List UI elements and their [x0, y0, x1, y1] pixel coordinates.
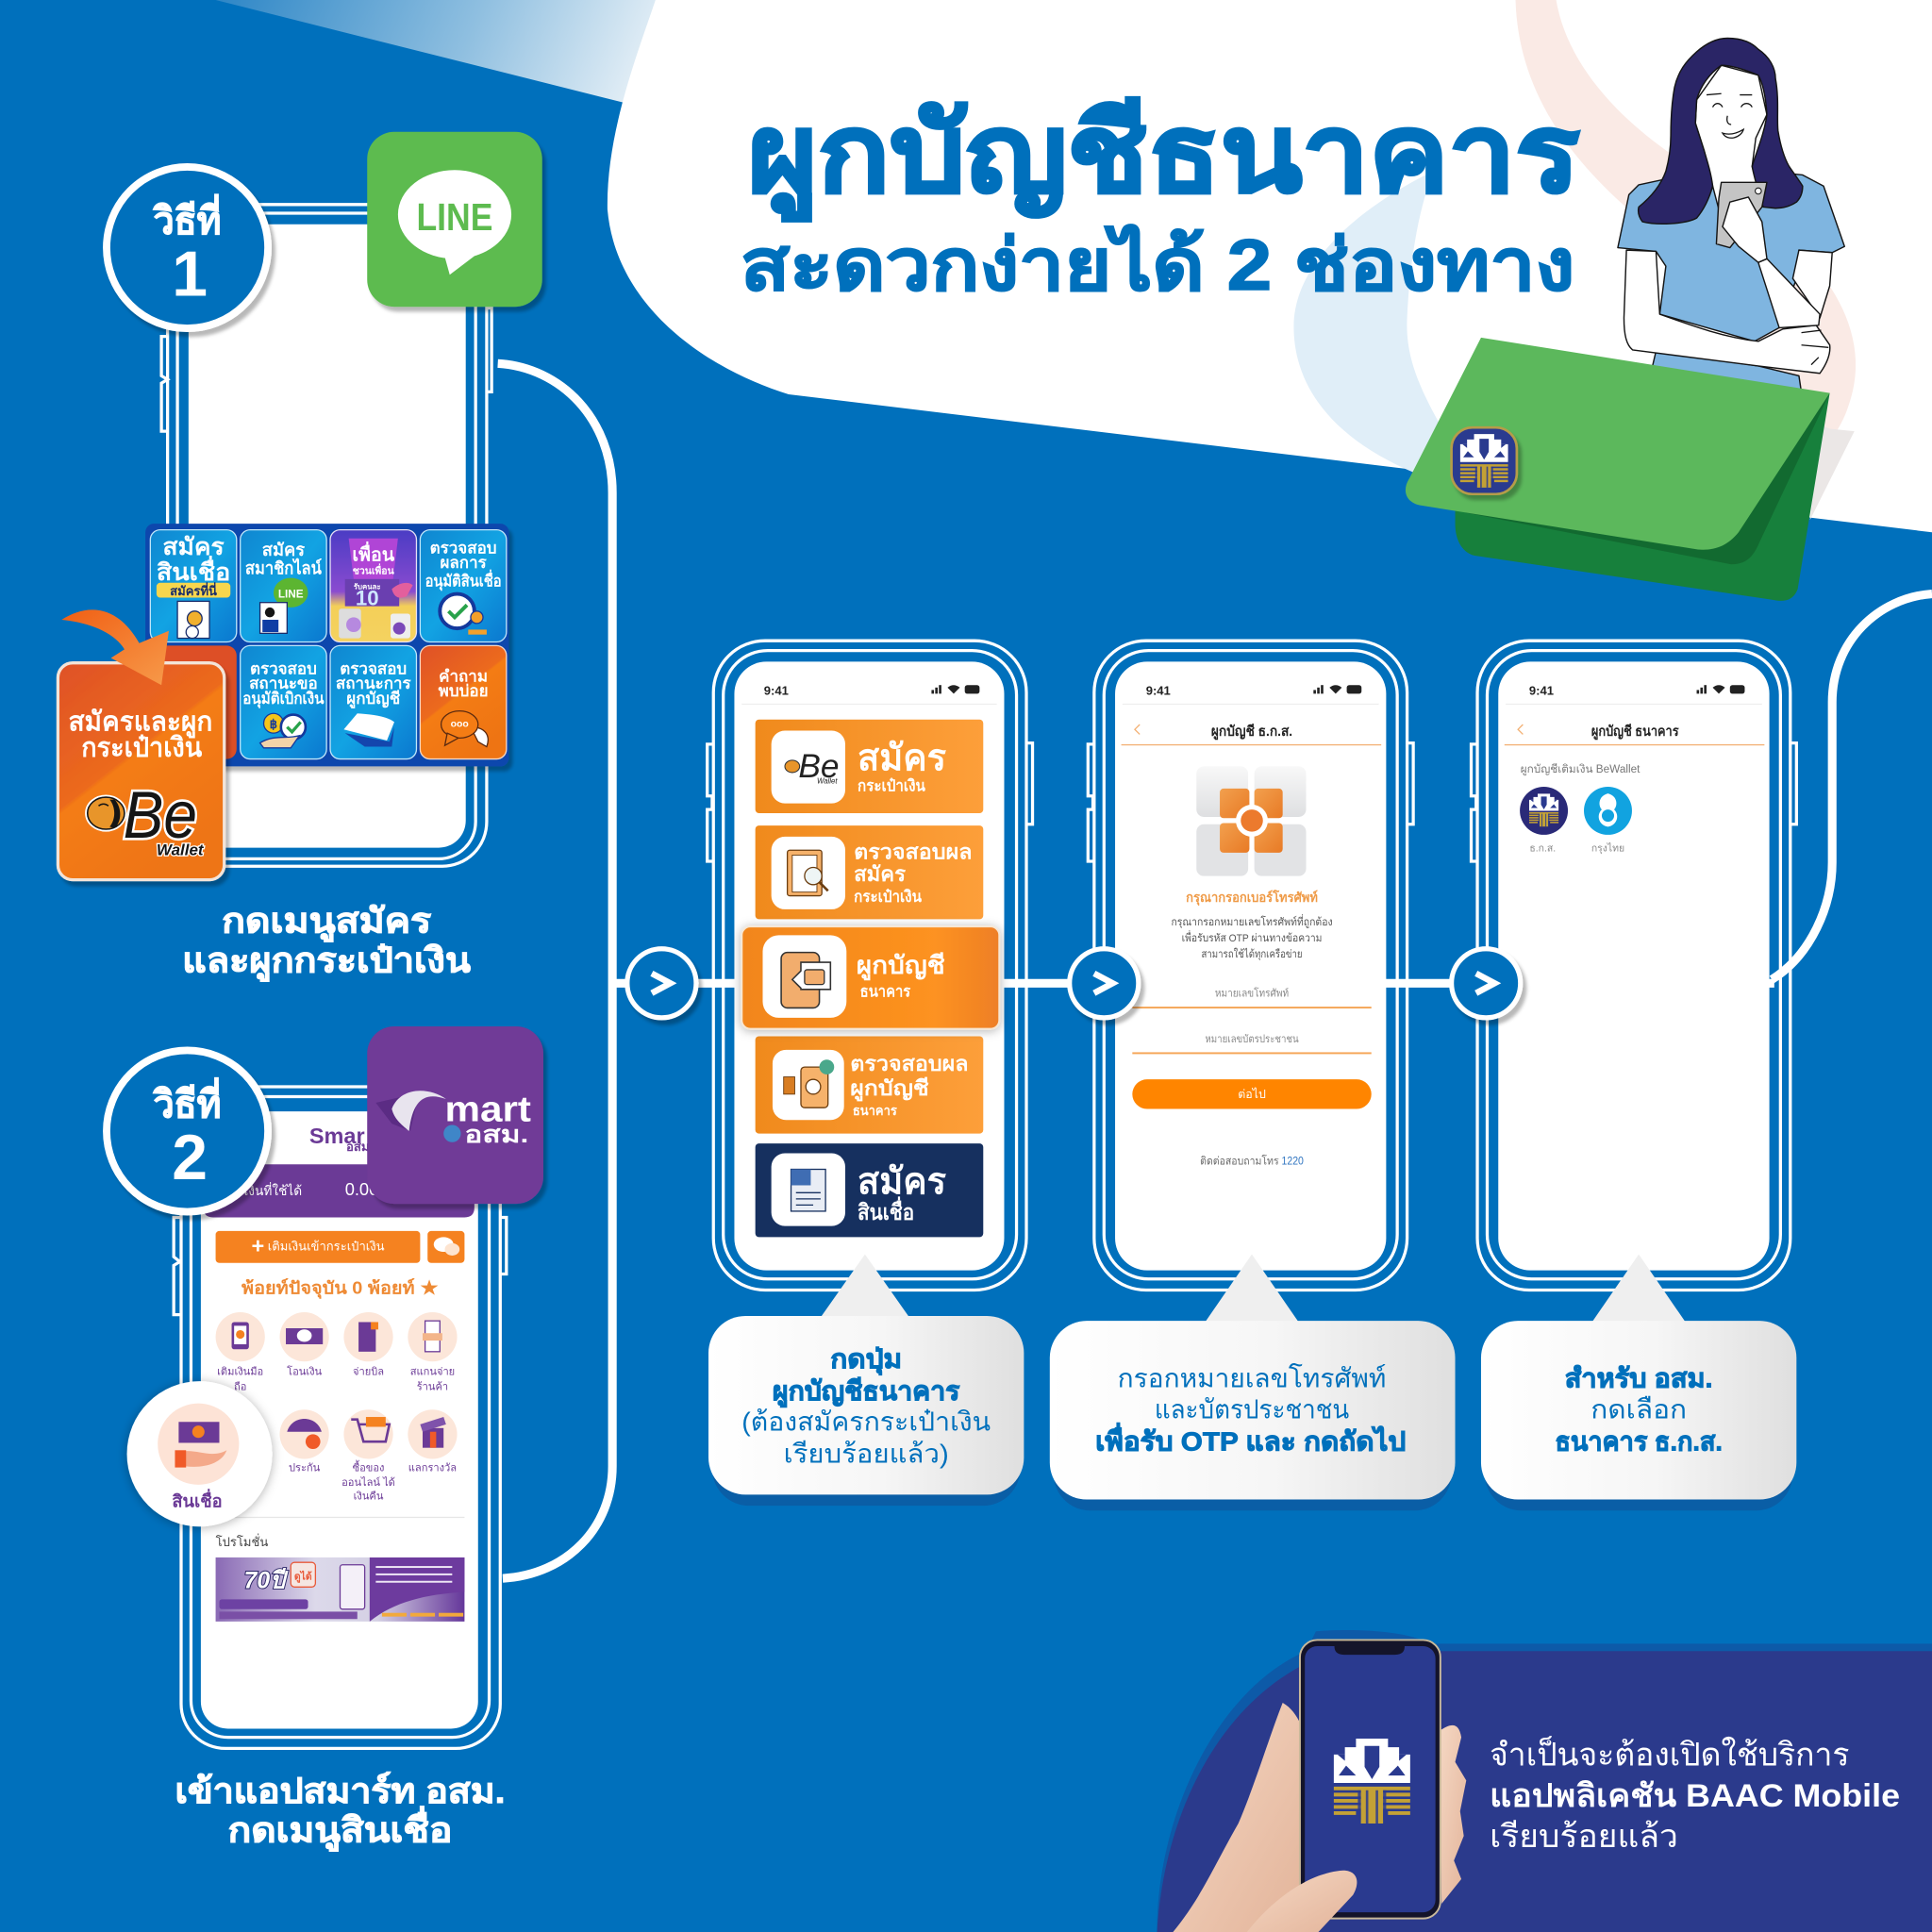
callout: press button: [708, 1255, 1024, 1506]
menu card: check binding: ธนาคาร: [853, 1104, 897, 1119]
icon: Krungthai bank: กรุงไทย: [1591, 842, 1624, 855]
top-left light wedge: [216, 0, 659, 105]
tile: binding status: [330, 645, 416, 759]
OTP prompt text: กรุณากรอกหมายเลขโทรศัพท์ที่ถูกต้อง: [1171, 914, 1333, 928]
tile: friend promo: 10: [356, 586, 379, 609]
hand holding phone: [1173, 1640, 1466, 1932]
pale pink swoosh: [1516, 0, 1856, 468]
method 2 badge: วิธีที่: [152, 1077, 221, 1126]
tile: disbursement status: อนุมัติเบิกเงิน: [242, 690, 325, 708]
tile: loan: สมัครที่นี่: [170, 581, 217, 598]
tile: LINE member: LINE: [278, 588, 304, 600]
panel: BAAC Mobile note: [1157, 1630, 1932, 1932]
service icons: [216, 1312, 458, 1458]
icon: LINE app: LINE: [416, 195, 492, 239]
arrow 1: [627, 949, 696, 1018]
note text: แอปพลิเคชัน BAAC Mobile: [1490, 1778, 1900, 1814]
service labels: ประกัน: [289, 1463, 321, 1474]
caption: method 1: [182, 902, 471, 983]
section label: ผูกบัญชีเติมเงิน BeWallet: [1521, 762, 1641, 776]
right upper arm: [1792, 250, 1832, 318]
callout: press button: (ต้องสมัครกระเป๋าเงิน: [741, 1407, 991, 1436]
panel: phone 1 LINE: [161, 205, 491, 866]
tile: disbursement status: สถานะขอ: [249, 675, 318, 692]
contact line: ติดต่อสอบถามโทร 1220: [1200, 1154, 1304, 1167]
next button: [1132, 1079, 1372, 1109]
screen header: ผูกบัญชี ธนาคาร: [1591, 724, 1679, 741]
highlighted card: BeWallet signup: กระเป๋าเงิน: [81, 733, 203, 763]
balance bar: 0.00: [345, 1179, 378, 1199]
method 1 badge: วิธีที่: [152, 193, 221, 242]
connector lines: [498, 363, 1932, 1578]
BeWallet logo: [88, 777, 205, 858]
tile: check approval: [420, 530, 507, 641]
envelope shadow: [1810, 425, 1855, 520]
icon: BAAC bank: [1520, 787, 1568, 855]
service labels: [217, 1365, 457, 1503]
app logo: อสม.: [346, 1140, 373, 1154]
caption: method 1: และผูกกระเป๋าเงิน: [182, 941, 471, 983]
promotion banner: [216, 1557, 464, 1622]
illustration: woman with phone: [1618, 38, 1844, 400]
menu card: wallet signup: Be: [798, 748, 839, 785]
points: พ้อยท์ปัจจุบัน 0 พ้อยท์ ★: [242, 1277, 439, 1299]
note text: เรียบร้อยแล้ว: [1490, 1819, 1678, 1855]
service labels: เติมเงินมือ: [217, 1366, 263, 1378]
method 2 badge: 2: [172, 1123, 208, 1193]
callout: choose bank: สำหรับ อสม.: [1565, 1364, 1713, 1393]
caption: method 2: กดเมนูสินเชื่อ: [228, 1806, 452, 1853]
hand on phone: [1723, 197, 1767, 262]
neck and face: [1695, 65, 1767, 209]
left arm: [1624, 250, 1830, 374]
menu card: loan signup: สินเชื่อ: [858, 1196, 914, 1224]
service labels: ถือ: [234, 1380, 246, 1392]
balance bar: [204, 1164, 475, 1217]
callout: choose bank: ธนาคาร ธ.ก.ส.: [1555, 1426, 1723, 1456]
callout: fill phone number: [1050, 1255, 1456, 1510]
facial features: [1707, 93, 1752, 138]
envelope back: [1456, 393, 1830, 601]
tile: loan: สมัคร: [162, 535, 225, 560]
hand on arm: [1802, 330, 1828, 365]
note text: [1490, 1736, 1900, 1855]
menu card highlighted: bind account: ธนาคาร: [860, 983, 911, 1001]
service labels: โอนเงิน: [287, 1365, 323, 1378]
status bar: [1123, 684, 1379, 705]
icon: Krungthai bank: [1584, 787, 1632, 855]
tile: LINE member: [241, 530, 326, 641]
menu card: check signup: ตรวจสอบผล: [854, 840, 973, 863]
loan highlight circle: [127, 1381, 273, 1526]
menu card: check binding: ตรวจสอบผล: [850, 1052, 969, 1075]
tile: disbursement status: ตรวจสอบ: [250, 659, 317, 677]
callout: fill phone number: เพื่อรับ OTP และ กดถัดไป: [1095, 1422, 1406, 1456]
OTP prompt text: [1171, 889, 1333, 960]
tile: loan: [150, 530, 237, 641]
menu card: wallet signup: กระเป๋าเงิน: [858, 777, 925, 795]
arrow 2: [1070, 949, 1139, 1018]
panel: phone OTP form: [1088, 641, 1413, 1291]
icon: security key: [1196, 766, 1306, 876]
tile: loan: สินเชื่อ: [157, 556, 230, 586]
tile: friend promo: รับคนละ: [354, 582, 381, 591]
tile: LINE member: สมาชิกไลน์: [245, 558, 322, 578]
panel: app phone menu: [708, 641, 1033, 1291]
service labels: เงินคืน: [354, 1491, 384, 1503]
loan highlight circle: สินเชื่อ: [172, 1488, 223, 1510]
tile: check approval: อนุมัติสินเชื่อ: [425, 570, 502, 591]
menu card highlighted: bind account: [741, 926, 999, 1029]
tile: disbursement status: ฿: [270, 717, 277, 731]
callout: press button: กดปุ่ม: [830, 1344, 902, 1375]
highlighted card: BeWallet signup: [58, 663, 225, 880]
OTP prompt text: เพื่อรับรหัส OTP ผ่านทางข้อความ: [1182, 930, 1322, 944]
forearm: [1758, 258, 1820, 327]
OTP prompt text: สามารถใช้ได้ทุกเครือข่าย: [1201, 948, 1303, 960]
menu card: check binding: ผูกบัญชี: [850, 1076, 929, 1102]
title: ผูกบัญชีธนาคาร: [748, 93, 1579, 221]
panel shadow band: [1157, 1630, 1932, 1932]
tile: orange hidden: [150, 645, 237, 759]
input fields: หมายเลขบัตรประชาชน: [1205, 1034, 1299, 1045]
tile: disbursement status: [241, 645, 326, 759]
title: [741, 93, 1579, 306]
tile: LINE member: สมัคร: [262, 540, 305, 559]
callout: press button: เรียบร้อยแล้ว): [784, 1439, 949, 1468]
arrow nodes: [627, 949, 1521, 1018]
screen header: [1122, 724, 1381, 745]
note text: จำเป็นจะต้องเปิดใช้บริการ: [1490, 1736, 1849, 1774]
LINE menu grid: [145, 524, 508, 766]
caption: method 2: เข้าแอปสมาร์ท อสม.: [175, 1772, 506, 1810]
status bar: [1506, 684, 1762, 705]
panel: phone bank select: [1472, 641, 1796, 1291]
promotion banner: 70ปี: [244, 1568, 289, 1594]
screen header: [1505, 724, 1764, 745]
tile: FAQ: พบบ่อย: [439, 682, 489, 700]
icon: LINE app: [367, 132, 542, 307]
top-up button: +: [251, 1233, 264, 1257]
screen header: ผูกบัญชี ธ.ก.ส.: [1211, 724, 1292, 741]
illustration: green envelope: [1406, 338, 1855, 601]
service labels: ซื้อของ: [353, 1460, 384, 1474]
callout: choose bank: กดเลือก: [1591, 1394, 1687, 1424]
phone in hand: [1716, 182, 1767, 248]
envelope fold: [1465, 393, 1830, 564]
tile: friend promo: ชวนเพื่อน: [353, 563, 395, 577]
method 1 badge: [107, 167, 268, 328]
balance bar: เงินที่ใช้ได้: [244, 1182, 302, 1198]
BeWallet logo: Be: [124, 777, 197, 852]
service labels: ออนไลน์ ได้: [341, 1476, 395, 1489]
caption: method 2: [175, 1772, 506, 1853]
service labels: สแกนจ่าย: [410, 1367, 455, 1378]
promotion heading: โปรโมชั่น: [216, 1533, 268, 1549]
tile: binding status: ผูกบัญชี: [346, 689, 401, 709]
next button: ต่อไป: [1238, 1088, 1266, 1101]
BAAC badge: [1452, 427, 1517, 494]
envelope flap: [1406, 338, 1830, 550]
menu card: check binding: [756, 1036, 983, 1134]
shirt: [1618, 166, 1844, 341]
highlighted card: BeWallet signup: สมัครและผูก: [68, 708, 212, 739]
service labels: ร้านค้า: [417, 1380, 448, 1392]
status bar: [741, 684, 997, 705]
arrow 3: [1452, 949, 1521, 1018]
method 2 badge: [107, 1050, 268, 1212]
icon: Smart OSOM app: mart: [445, 1091, 531, 1130]
tile: friend promo: เพื่อน: [352, 541, 395, 565]
status bar: 9:41: [1529, 684, 1554, 698]
tile: binding status: สถานะการ: [336, 675, 412, 692]
tile: FAQ: คำถาม: [439, 667, 488, 685]
menu card: check signup: สมัคร: [854, 862, 906, 886]
hair: [1639, 38, 1803, 224]
tile: binding status: ตรวจสอบ: [340, 659, 407, 677]
service labels: จ่ายบิล: [353, 1367, 384, 1378]
menu card: loan signup: [756, 1143, 983, 1237]
menu card highlighted: bind account: ผูกบัญชี: [857, 951, 945, 981]
status bar: 9:41: [1146, 684, 1171, 698]
menu card: loan signup: สมัคร: [858, 1162, 946, 1203]
tile: check approval: ผลการ: [440, 554, 488, 572]
menu card: check signup: กระเป๋าเงิน: [854, 888, 922, 906]
icon: BAAC bank: ธ.ก.ส.: [1529, 844, 1556, 855]
panel: phone 2 Smart OSOM: [174, 1087, 507, 1748]
icon: Smart OSOM app: อสม.: [464, 1123, 528, 1148]
callout: choose bank: [1481, 1255, 1796, 1510]
callout: fill phone number: กรอกหมายเลขโทรศัพท์: [1118, 1363, 1386, 1393]
icon: Smart OSOM app: [367, 1026, 543, 1204]
top-up button: [216, 1231, 464, 1263]
method 1 badge: 1: [172, 239, 208, 309]
icon: orange curved arrow: [61, 609, 169, 685]
header white shape: [608, 0, 1932, 532]
BeWallet logo: Wallet: [157, 841, 205, 858]
subtitle: สะดวกง่ายได้ 2 ช่องทาง: [741, 224, 1574, 306]
caption: method 1: กดเมนูสมัคร: [222, 902, 432, 943]
menu card: check signup: [756, 825, 983, 919]
app logo: Smar: [309, 1124, 365, 1148]
menu card: wallet signup: Wallet: [817, 777, 838, 786]
panel fill: [1157, 1651, 1932, 1932]
callout: press button: ผูกบัญชีธนาคาร: [773, 1376, 959, 1407]
lower shirt: [1651, 351, 1803, 400]
service labels: แลกรางวัล: [408, 1463, 457, 1474]
tile: friend promo: [330, 530, 416, 641]
tile: check approval: ตรวจสอบ: [430, 539, 497, 557]
menu card: wallet signup: สมัคร: [858, 738, 946, 778]
status bar: 9:41: [764, 684, 789, 698]
tile: FAQ: ooo: [451, 720, 469, 730]
callout: fill phone number: และบัตรประชาชน: [1155, 1394, 1349, 1424]
input fields: [1132, 987, 1372, 1054]
menu card: wallet signup: [756, 720, 983, 813]
OTP prompt text: กรุณากรอกเบอร์โทรศัพท์: [1186, 889, 1318, 906]
input fields: หมายเลขโทรศัพท์: [1215, 987, 1289, 1000]
tile: FAQ: [420, 645, 507, 759]
promotion banner: ดูได้: [294, 1570, 312, 1583]
pale blue crescent: [1293, 172, 1476, 487]
top-up button: เติมเงินเข้ากระเป๋าเงิน: [264, 1240, 385, 1254]
